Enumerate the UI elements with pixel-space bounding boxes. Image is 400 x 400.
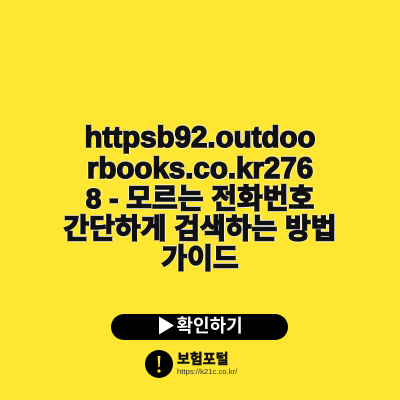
icon: play triangle bbox=[159, 316, 174, 334]
title: 가이드 bbox=[161, 243, 239, 274]
icon: exclamation mark bbox=[145, 350, 173, 378]
logo url: https://k21c.co.kr/ bbox=[177, 367, 237, 376]
logo: insurance portal bbox=[145, 350, 238, 378]
button label: 확인하기 bbox=[176, 316, 243, 336]
title: httpsb92.outdoo bbox=[84, 121, 316, 154]
title bbox=[63, 121, 337, 274]
button: confirm bbox=[111, 314, 288, 340]
title: 8 - 모르는 전화번호 bbox=[86, 183, 314, 214]
title: 간단하게 검색하는 방법 bbox=[63, 213, 337, 244]
title: rbooks.co.kr276 bbox=[87, 152, 313, 185]
logo name: 보험포털 bbox=[177, 351, 229, 367]
